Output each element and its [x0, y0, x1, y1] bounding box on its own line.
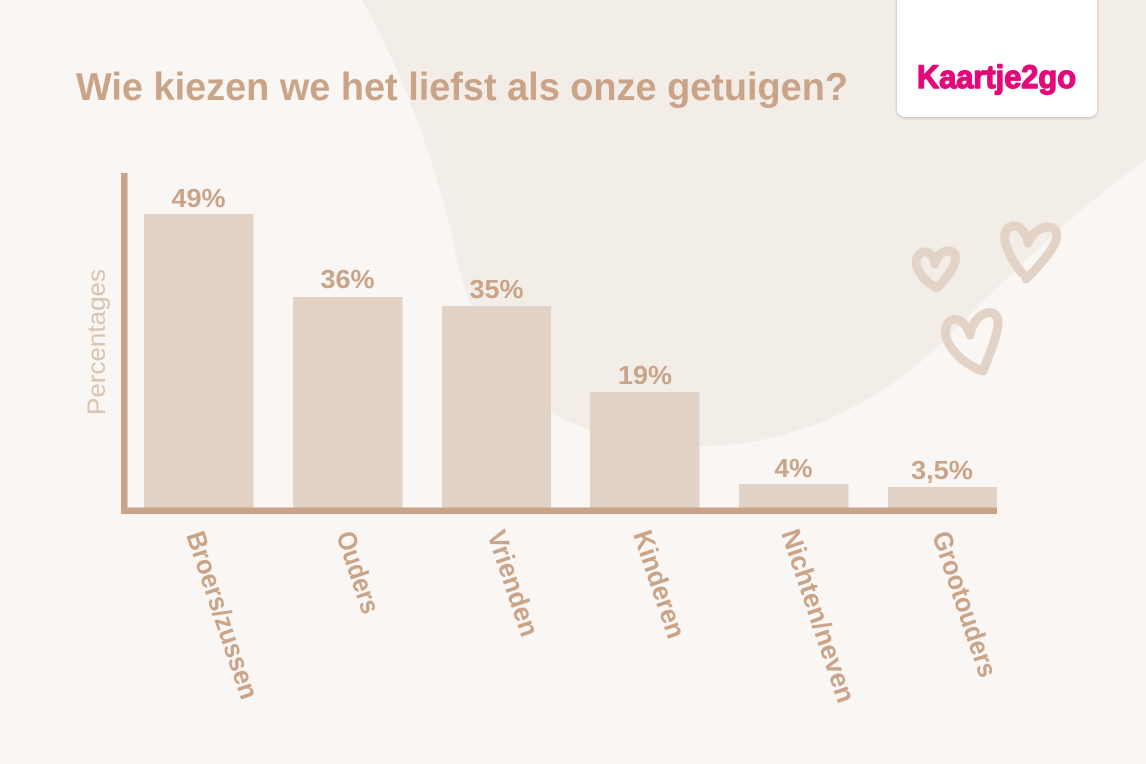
axes: [121, 173, 997, 514]
icon: small heart: [916, 251, 956, 288]
icon: large top heart: [1005, 226, 1057, 279]
logo card: [897, 0, 1097, 117]
value: 49%: 49%: [172, 183, 226, 213]
label: Vrienden: Vrienden: [481, 526, 545, 640]
value: 3,5%: 3,5%: [911, 455, 973, 485]
bar: Grootouders: [888, 487, 997, 508]
value: 4%: 4%: [774, 453, 812, 483]
value: 19%: 19%: [618, 360, 672, 390]
value: 35%: 35%: [470, 274, 524, 304]
label: Nichten/neven: Nichten/neven: [775, 525, 861, 707]
label: Grootouders: Grootouders: [926, 527, 1003, 681]
icon: bottom heart: [945, 313, 998, 371]
bar: Kinderen: [590, 392, 700, 508]
label: Ouders: Ouders: [330, 527, 386, 618]
bar: Nichten/neven: [739, 484, 848, 508]
title: Wie kiezen we het liefst als onze getuigen?: [76, 66, 848, 109]
logo wordmark: Kaartje2go: [917, 59, 1076, 95]
bar: Broers/zussen: [144, 214, 254, 508]
background blob: [362, 0, 1146, 446]
label: Kinderen: Kinderen: [627, 526, 691, 642]
icons: hearts: [916, 226, 1057, 371]
y axis title: Percentages: [83, 269, 111, 415]
bar: Ouders: [293, 297, 402, 508]
bar: Vrienden: [442, 306, 551, 508]
label: Broers/zussen: Broers/zussen: [180, 527, 264, 703]
bar chart: [83, 173, 1003, 707]
value: 36%: 36%: [320, 264, 374, 294]
